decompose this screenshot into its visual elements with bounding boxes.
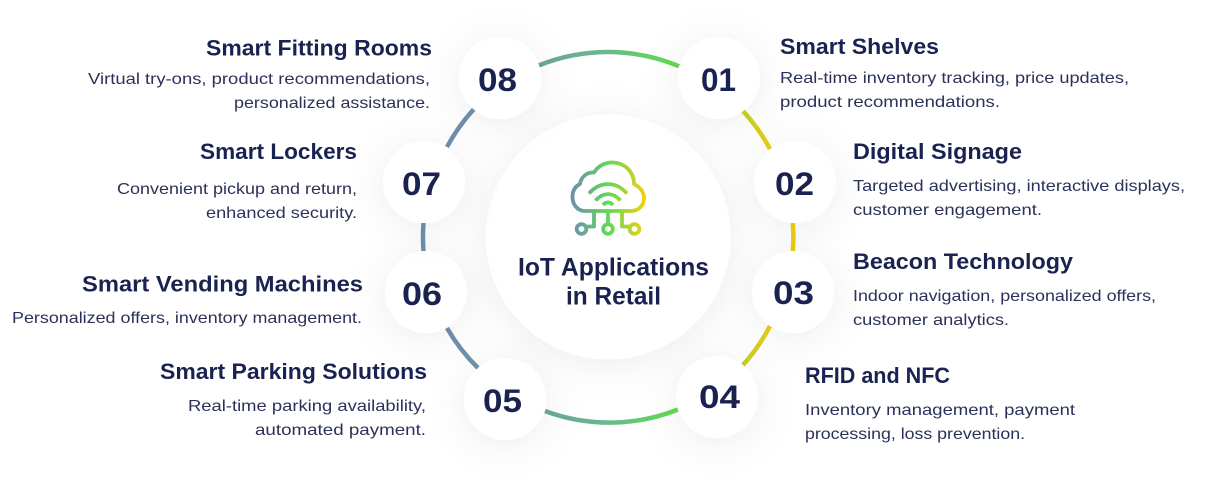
center title: in Retail (566, 282, 661, 310)
center circle (486, 114, 731, 360)
text block: Smart Parking Solutions: Real-time parking availability, (188, 398, 426, 415)
text block: Smart Vending Machines: Smart Vending Machines (82, 272, 363, 296)
number badge 03 (752, 251, 834, 333)
text block: Smart Shelves (780, 34, 1129, 111)
text block: Smart Vending Machines: Personalized offers, inventory management. (12, 310, 362, 327)
number badge 06 (385, 251, 467, 333)
number badge 06: 06 (402, 276, 442, 312)
text block: Smart Parking Solutions (160, 359, 427, 439)
text block: Smart Shelves: Smart Shelves (780, 34, 939, 59)
text block: Smart Lockers (117, 139, 357, 222)
text block: Smart Fitting Rooms (88, 36, 432, 112)
number badge 03: 03 (773, 275, 814, 311)
text block: Smart Fitting Rooms: Virtual try-ons, product recommendations, (88, 71, 430, 88)
text block: RFID and NFC: RFID and NFC (805, 363, 950, 388)
number badge 04 (676, 356, 758, 438)
text block: Smart Lockers: Convenient pickup and return, (117, 181, 357, 198)
text block: Smart Fitting Rooms: Smart Fitting Rooms (206, 36, 432, 60)
icon: IoT cloud with wifi and circuit nodes (572, 162, 644, 234)
number badge 08 (459, 37, 541, 119)
number badge 05: 05 (483, 383, 522, 419)
ring of connecting arcs (423, 52, 793, 423)
text block: Smart Vending Machines (12, 272, 363, 327)
text block: Smart Lockers: Smart Lockers (200, 139, 357, 164)
text block: RFID and NFC: Inventory management, payment (805, 402, 1076, 419)
text block: Beacon Technology: customer analytics. (853, 312, 1009, 329)
text block: RFID and NFC: processing, loss prevention. (805, 426, 1025, 443)
number badge 08: 08 (478, 62, 517, 98)
number badge 01 (678, 37, 760, 119)
text block: Smart Parking Solutions: Smart Parking Solutions (160, 359, 427, 384)
number badge 02 (754, 141, 836, 223)
text block: Beacon Technology: Beacon Technology (853, 249, 1074, 274)
text block: Smart Shelves: Real-time inventory tracking, price updates, (780, 70, 1129, 87)
number badge 05 (464, 358, 546, 440)
text block: Smart Parking Solutions: automated payment. (255, 422, 426, 439)
text block: Smart Shelves: product recommendations. (780, 94, 1000, 111)
text block: Smart Fitting Rooms: personalized assistance. (234, 95, 430, 112)
text block: Smart Lockers: enhanced security. (206, 205, 357, 222)
center title: IoT Applications (518, 254, 709, 282)
number badge 07: 07 (402, 166, 441, 202)
number badge 01: 01 (701, 62, 736, 98)
text block: Beacon Technology: Indoor navigation, personalized offers, (853, 288, 1156, 305)
number badge 04: 04 (699, 379, 740, 415)
text block: Beacon Technology (853, 249, 1156, 329)
text block: Digital Signage: customer engagement. (853, 202, 1042, 219)
text block: RFID and NFC (805, 363, 1076, 443)
text block: Digital Signage: Digital Signage (853, 139, 1022, 164)
text block: Digital Signage: Targeted advertising, interactive displays, (853, 178, 1185, 195)
text block: Digital Signage (853, 139, 1185, 219)
number badge 07 (383, 141, 465, 223)
center title (518, 254, 709, 310)
number badge 02: 02 (775, 166, 814, 202)
